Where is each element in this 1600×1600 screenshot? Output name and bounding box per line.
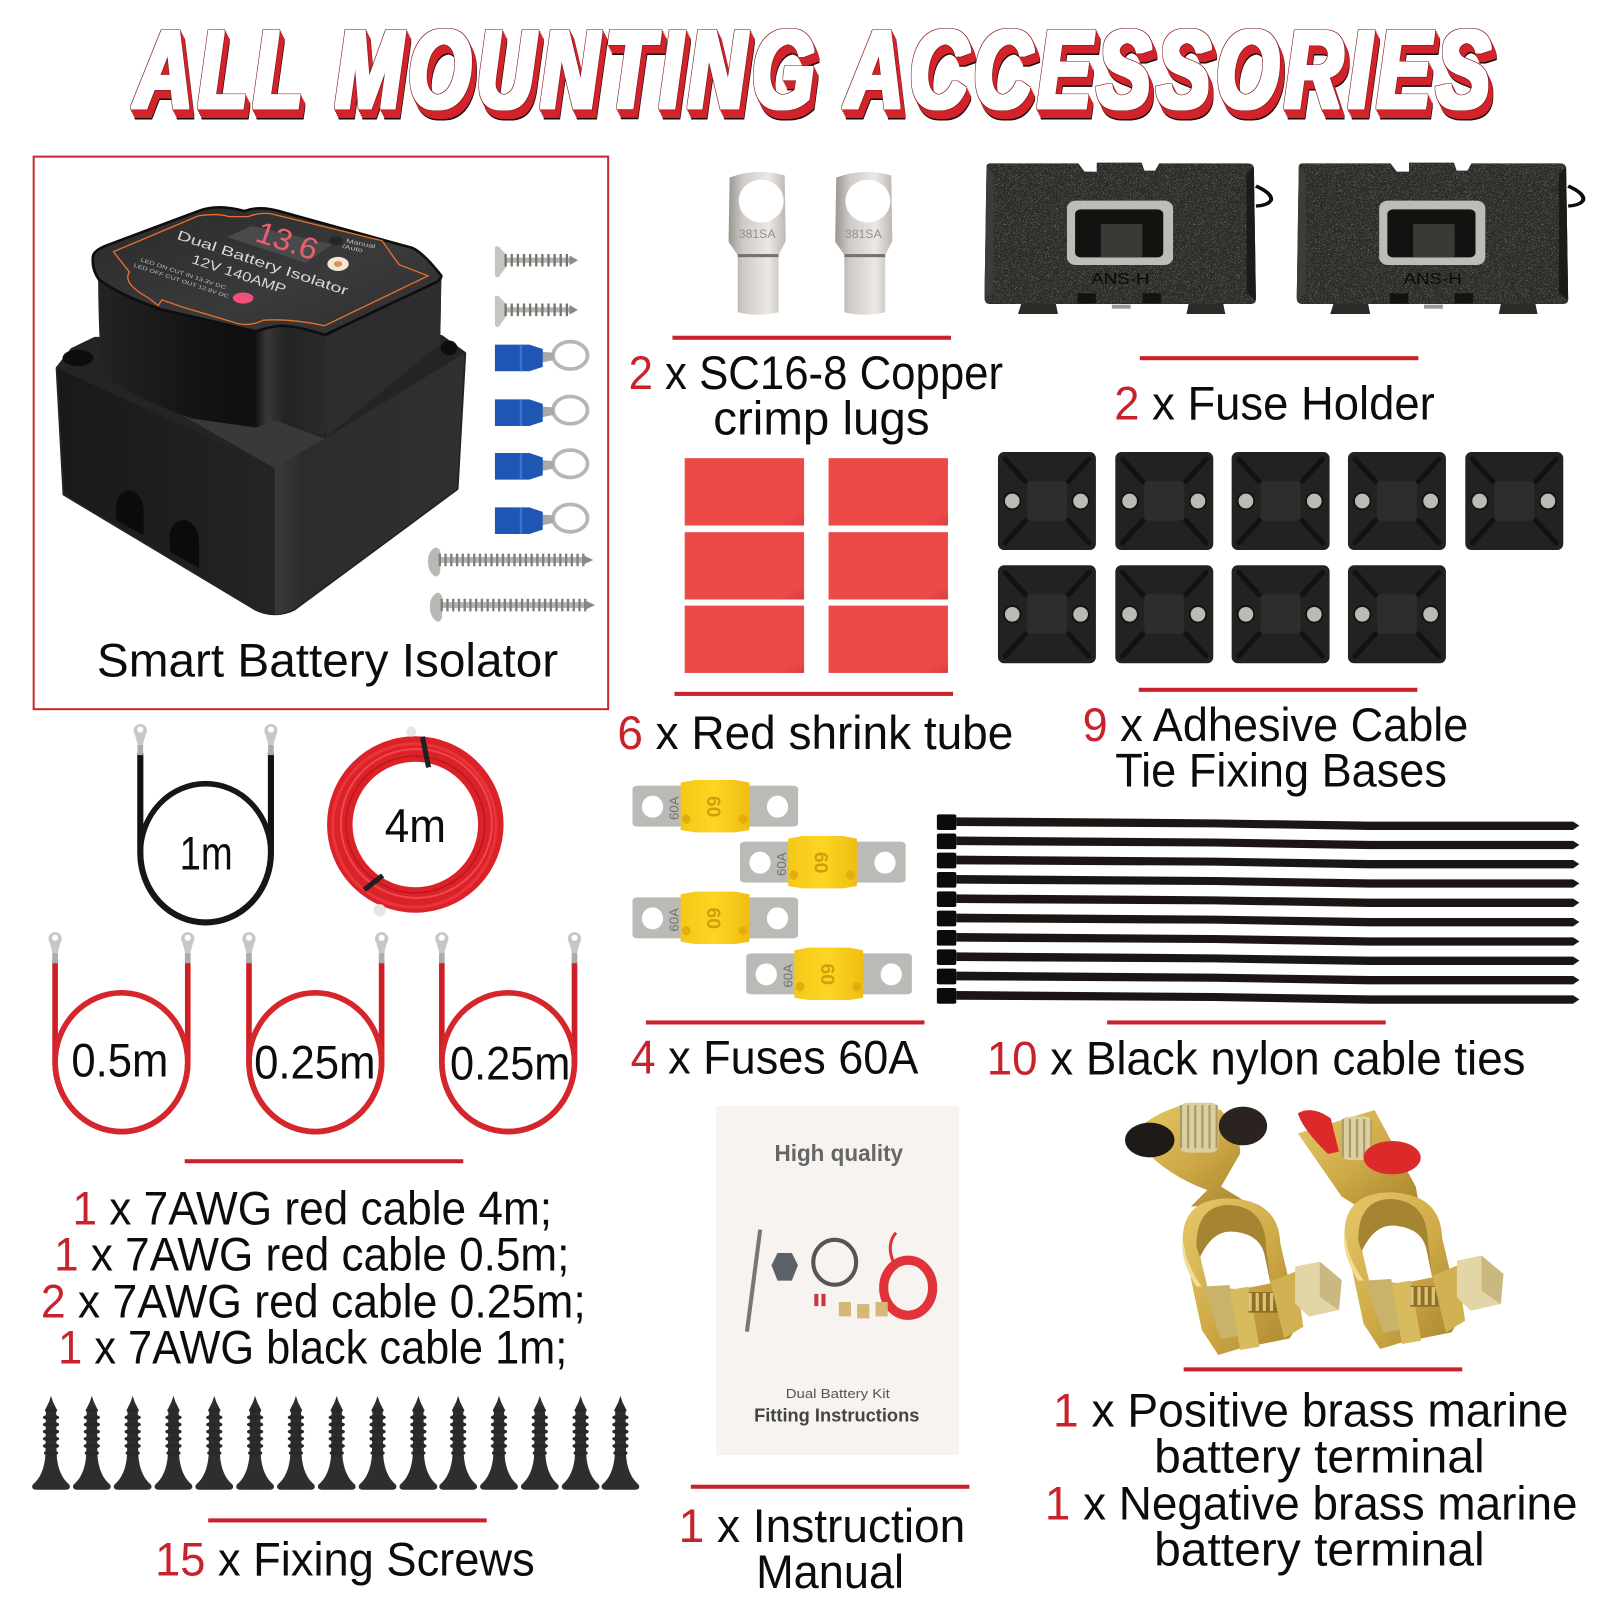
icon: negative terminal bbox=[1125, 1103, 1342, 1355]
icon: battery isolator device: /Auto bbox=[341, 244, 364, 254]
icon: fuse holder left bbox=[984, 163, 1271, 314]
icon: positive terminal bbox=[1298, 1110, 1504, 1349]
icon: cable ties bbox=[937, 814, 1579, 1004]
panel: red shrink tube bbox=[617, 458, 1013, 759]
icon: battery isolator device: Dual Battery Isolator bbox=[175, 228, 351, 298]
icon: copper lugs: 381SA bbox=[845, 227, 882, 241]
caption: fixing bases bbox=[1083, 699, 1468, 797]
icon: red cable 0.25m second bbox=[435, 932, 581, 1132]
icon: mounting screws and ring terminals bbox=[428, 246, 595, 622]
caption: crimp lugs: crimp lugs bbox=[713, 393, 930, 445]
panel: adhesive cable tie bases bbox=[998, 452, 1563, 797]
caption: cable list: 1 x 7AWG red cable 0.5m; bbox=[54, 1228, 569, 1280]
caption: terminals: 1 x Negative brass marine bbox=[1045, 1477, 1578, 1529]
panel: brass battery terminals bbox=[1045, 1103, 1578, 1575]
caption: cable list: 1 x 7AWG red cable 4m; bbox=[72, 1182, 552, 1234]
icon: fuses: 60A bbox=[667, 908, 682, 932]
icon: shrink tubes bbox=[685, 458, 948, 673]
panel: instruction manual bbox=[679, 1106, 969, 1598]
caption: cable list: 2 x 7AWG red cable 0.25m; bbox=[41, 1275, 586, 1327]
panel: copper crimp lugs bbox=[629, 172, 1003, 445]
icon: battery isolator device: 13.6 bbox=[252, 215, 323, 267]
icon: copper lugs: 381SA bbox=[739, 227, 776, 241]
icon: manual booklet: Dual Battery Kit bbox=[786, 1386, 890, 1401]
caption: crimp lugs bbox=[629, 347, 1003, 445]
title: ALL MOUNTING ACCESSORIES bbox=[133, 7, 1490, 132]
icon: red cable 0.5m bbox=[48, 932, 194, 1132]
icon: fuses: 60A bbox=[780, 964, 795, 988]
panel: nylon cable ties bbox=[937, 814, 1579, 1084]
caption: fixing bases: 9 x Adhesive Cable bbox=[1083, 699, 1468, 751]
caption: smart battery isolator: Smart Battery Isolator bbox=[97, 635, 558, 687]
caption: screws: 15 x Fixing Screws bbox=[155, 1534, 535, 1586]
caption: terminals: 1 x Positive brass marine bbox=[1053, 1385, 1568, 1437]
caption: terminals bbox=[1045, 1385, 1578, 1575]
label: 1m: 1m bbox=[180, 827, 233, 879]
caption: cable list bbox=[41, 1182, 586, 1373]
icon: red coil 4m bbox=[333, 727, 496, 916]
panel: smart battery isolator bbox=[34, 157, 608, 709]
caption: terminals: battery terminal bbox=[1154, 1523, 1485, 1575]
caption: fuses: 4 x Fuses 60A bbox=[631, 1031, 919, 1083]
label: 0.25m first: 0.25m bbox=[254, 1037, 376, 1089]
icon: fuses: 60A bbox=[667, 796, 682, 820]
caption: cable list: 1 x 7AWG black cable 1m; bbox=[58, 1321, 567, 1373]
icon: manual booklet: Fitting Instructions bbox=[754, 1404, 919, 1425]
icon: screws bbox=[32, 1396, 639, 1490]
icon: battery isolator device: LED OFF CUT OUT 12.8V DC bbox=[133, 263, 230, 300]
caption: cable ties: 10 x Black nylon cable ties bbox=[987, 1032, 1526, 1084]
caption: manual bbox=[679, 1500, 965, 1598]
icon: manual booklet bbox=[716, 1106, 959, 1455]
icon: red cable 0.25m first bbox=[242, 932, 388, 1132]
icon: battery isolator device: 12V 140AMP bbox=[190, 252, 288, 297]
icon: battery isolator device: LED ON CUT IN 13.3V DC bbox=[140, 257, 227, 291]
caption: shrink tube: 6 x Red shrink tube bbox=[617, 707, 1013, 759]
label: 0.5m: 0.5m bbox=[71, 1035, 168, 1087]
icon: fuses: 60 bbox=[702, 796, 724, 817]
icon: fuse holder left: ANS-H bbox=[1091, 270, 1150, 288]
caption: manual: 1 x Instruction bbox=[679, 1500, 965, 1552]
icon: tie bases bbox=[998, 452, 1563, 663]
icon: fuses: 60 bbox=[810, 852, 832, 873]
icon: fuses: 60 bbox=[816, 964, 838, 985]
icon: fuse holder right: ANS-H bbox=[1403, 270, 1462, 288]
icon: fuses bbox=[632, 780, 912, 1000]
panel: fuses 60A bbox=[631, 780, 924, 1083]
icon: copper lugs bbox=[729, 172, 892, 315]
label: 4m: 4m bbox=[385, 800, 446, 852]
panel: cables bbox=[41, 724, 586, 1373]
icon: fuse holder right bbox=[1297, 163, 1583, 314]
icon: black cable 1m bbox=[134, 724, 278, 922]
caption: manual: Manual bbox=[756, 1546, 904, 1598]
icon: fuses: 60A bbox=[774, 852, 789, 876]
caption: crimp lugs: 2 x SC16-8 Copper bbox=[629, 347, 1003, 399]
caption: fuse holder: 2 x Fuse Holder bbox=[1114, 377, 1435, 429]
icon: manual booklet: High quality bbox=[774, 1140, 903, 1166]
caption: fixing bases: Tie Fixing Bases bbox=[1115, 745, 1447, 797]
icon: fuses: 60 bbox=[702, 907, 724, 929]
panel: fuse holders bbox=[984, 163, 1583, 429]
caption: terminals: battery terminal bbox=[1154, 1430, 1485, 1482]
icon: battery isolator device bbox=[58, 207, 464, 614]
label: 0.25m second: 0.25m bbox=[450, 1038, 570, 1090]
icon: battery isolator device: Manual bbox=[345, 239, 376, 250]
panel: fixing screws bbox=[32, 1396, 639, 1586]
